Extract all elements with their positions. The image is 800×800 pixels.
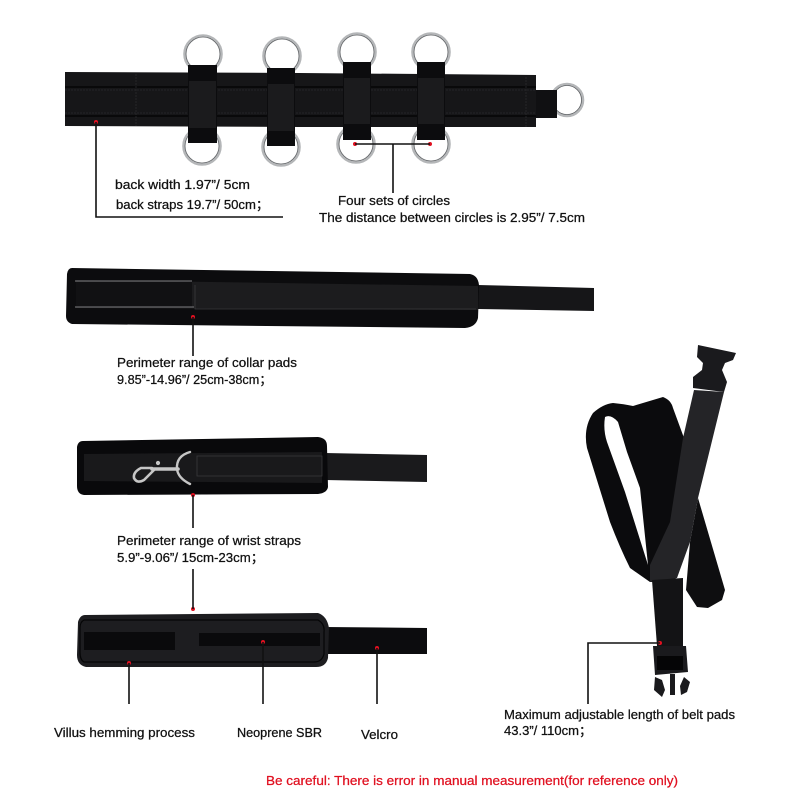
callout: velcro [361,646,398,742]
callout: villus hemming process [54,661,195,740]
product: long belt with buckles [586,345,736,697]
callout: four sets of circles: The distance between circles is 2.95”/ 7.5cm [319,211,585,225]
product: wrist strap reverse with velcro [77,613,427,667]
strap loops [188,62,445,146]
callout: belt pads [504,641,735,738]
vertical strap to lower buckle [652,578,683,646]
callout: four sets of circles [319,142,585,225]
callout: collar pads: 9.85”-14.96”/ 25cm-38cm； [117,373,272,387]
icon: top buckle [693,345,736,392]
product: collar pad [66,268,594,328]
product: wrist strap with snap hook [77,437,427,495]
callout: neoprene SBR [237,640,322,740]
callout: back width and straps [94,120,283,217]
metal rings [184,34,583,166]
callout: collar pads [117,315,297,387]
belt body [65,72,536,127]
callout: belt pads: Maximum adjustable length of belt pads [504,708,735,722]
callout: velcro: Velcro [361,728,398,742]
lower strap end [686,498,725,608]
gap inside the loop [604,416,648,565]
callout: four sets of circles: Four sets of circles [338,194,450,208]
icon: bottom buckle [653,646,690,697]
callout: wrist straps [117,493,301,611]
callout: back width and straps: back width 1.97”/ 5cm [115,178,250,192]
callout: collar pads: Perimeter range of collar pads [117,356,297,370]
callout: neoprene SBR: Neoprene SBR [237,726,322,740]
warning note: Be careful: There is error in manual measurement(for reference only) [266,774,678,788]
product: back strap with four sets of rings [65,34,583,166]
front strap [650,390,724,582]
icon: snap hook [134,452,190,484]
callout: back width and straps: back straps 19.7”/ 50cm； [116,198,269,212]
callout: wrist straps: 5.9”-9.06”/ 15cm-23cm； [117,551,264,565]
end tab [530,90,557,118]
callout: villus hemming process: Villus hemming process [54,726,195,740]
callout: belt pads: 43.3”/ 110cm； [504,724,592,738]
looped strap silhouette [586,397,690,582]
callout: wrist straps: Perimeter range of wrist straps [117,534,301,548]
